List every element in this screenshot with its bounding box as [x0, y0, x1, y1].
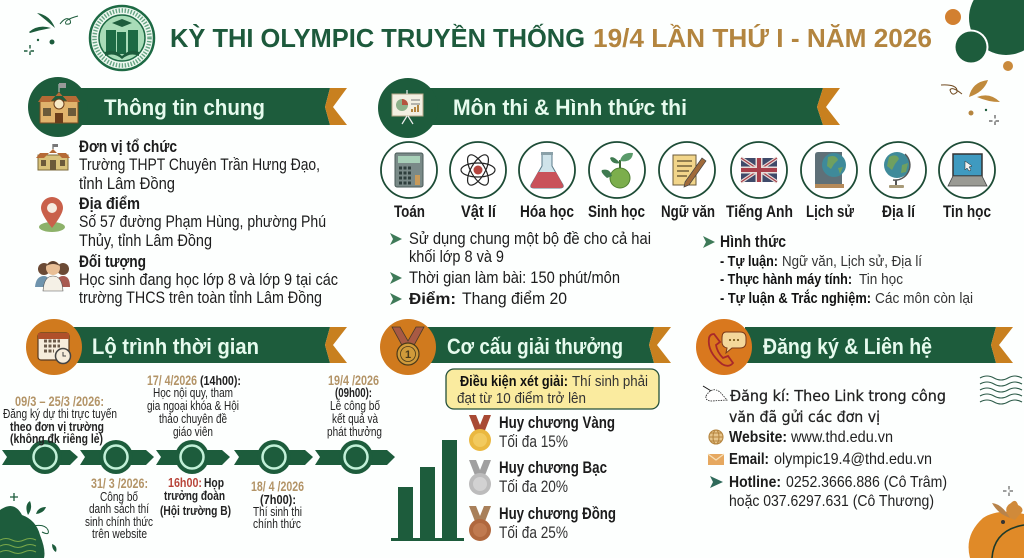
timeline arrows — [2, 450, 395, 465]
text: email: Email: — [729, 451, 769, 468]
milestone: 16h00 — [160, 475, 231, 518]
subject: Địa lí: Địa lí — [882, 202, 916, 221]
milestone: 19/4: (09h00): — [335, 385, 372, 400]
text: exam rules bullets: Thang điểm 20 — [462, 289, 567, 308]
medal: gold: Tối đa 15% — [499, 432, 568, 451]
milestone: 09/3 - 25/3: theo đơn vị trường — [10, 419, 104, 434]
callout: điều kiện xét giải: Điều kiện xét giải: — [460, 373, 568, 390]
subject: Hóa học — [519, 142, 575, 221]
header: Lộ trình thời gian — [26, 319, 347, 375]
milestone: 16h00: 16h00: — [168, 475, 202, 490]
medal: gold: Huy chương Vàng — [499, 413, 615, 432]
text: registration: văn đã gửi các đơn vị — [729, 408, 880, 426]
milestone: 16h00: trưởng đoàn — [164, 488, 225, 503]
text: địa điểm: Địa điểm — [79, 194, 140, 213]
text: đối tượng: trường THCS trên toàn tỉnh Lâm Đồng — [79, 288, 322, 307]
header: Cơ cấu giải thưởng: Cơ cấu giải thưởng — [447, 334, 623, 359]
text: exam format: Các môn còn lại — [875, 290, 973, 307]
milestone: 31/3: sinh chính thức — [85, 514, 153, 529]
text: đơn vị tổ chức: Trường THPT Chuyên Trần Hưng Đạo, — [79, 155, 320, 174]
text: hotline: 0252.3666.886 (Cô Trâm) — [786, 474, 947, 491]
milestone: 09/3 - 25/3: Đăng ký dự thi trực tuyến — [3, 406, 117, 421]
text: exam format: Hình thức — [720, 232, 786, 251]
bar chart — [391, 440, 464, 541]
milestone: 17/4: 17/ 4/2026 — [147, 373, 197, 388]
text: địa điểm: Thủy, tỉnh Lâm Đồng — [79, 231, 212, 250]
milestone: 31/3: danh sách thí — [89, 501, 149, 516]
icon: arrow — [710, 476, 723, 488]
text: website: www.thd.edu.vn — [790, 429, 893, 446]
text: registration: Đăng kí: Theo Link trong công — [730, 387, 946, 405]
text: registration — [729, 387, 946, 426]
subject: Tin học — [939, 142, 995, 221]
text: website — [729, 429, 893, 446]
text: exam rules bullets: khối lớp 8 và 9 — [409, 247, 504, 266]
text: đơn vị tổ chức — [79, 137, 320, 193]
medal: bronze: Tối đa 25% — [499, 523, 568, 542]
icon: medal — [392, 327, 424, 365]
subject: Lịch sử: Lịch sử — [806, 202, 855, 221]
subject: Lịch sử — [801, 142, 857, 221]
text: hotline — [729, 474, 947, 510]
icon: school — [38, 83, 80, 123]
icon: presentation board — [392, 90, 423, 124]
subject: Ngữ văn: Ngữ văn — [661, 202, 715, 221]
text: hotline: Hotline: — [729, 474, 781, 491]
decoration: top left splash — [24, 13, 78, 57]
text: địa điểm — [79, 194, 326, 250]
text: đối tượng: Đối tượng — [79, 252, 146, 271]
header: Đăng ký & Liên hệ: Đăng ký & Liên hệ — [763, 334, 932, 359]
text: website: Website: — [729, 429, 787, 446]
header: Thông tin chung: Thông tin chung — [104, 95, 265, 120]
header: Môn thi & Hình thức thi — [378, 78, 840, 138]
icon: organizer school — [36, 144, 70, 170]
text: exam rules bullets — [390, 229, 651, 308]
milestone: 18/4: Thí sinh thi — [253, 504, 302, 519]
text: exam format — [703, 232, 973, 307]
header: Thông tin chung — [28, 77, 347, 137]
icon: phone and chat — [709, 332, 746, 366]
text: exam format: - Tự luận & Trắc nghiệm: — [720, 289, 871, 307]
icon: students — [35, 261, 70, 291]
icon: medal: 1 — [405, 349, 411, 361]
medal: silver — [469, 458, 607, 496]
milestone: 17/4: (14h00): — [200, 373, 241, 388]
panel: contact — [703, 386, 947, 510]
icon: pointer — [703, 386, 727, 401]
subject: Sinh học: Sinh học — [588, 202, 645, 221]
icon: calendar clock — [38, 333, 70, 364]
callout: điều kiện xét giải — [446, 369, 659, 409]
text: hotline: hoặc 037.6297.631 (Cô Thương) — [729, 493, 934, 510]
subject: Sinh học — [588, 142, 645, 221]
milestone: 31/3 — [85, 476, 153, 541]
header: Lộ trình thời gian: Lộ trình thời gian — [92, 334, 259, 359]
milestone: 17/4 — [147, 373, 241, 439]
medal: silver: Huy chương Bạc — [499, 458, 607, 477]
medal: bronze: Huy chương Đồng — [499, 504, 616, 523]
title: KỲ THI OLYMPIC TRUYỀN THỐNG — [170, 23, 585, 53]
callout: điều kiện xét giải: Thí sinh phải — [572, 373, 648, 390]
milestone: 09/3 - 25/3: (không đk riêng lẻ) — [10, 431, 103, 446]
subject: Tiếng Anh: Tiếng Anh — [726, 202, 793, 221]
milestone: 16h00: (Hội trường B) — [160, 503, 231, 518]
milestone: 19/4: phát thưởng — [327, 424, 382, 439]
subject: Vật lí — [450, 142, 506, 221]
medal: silver: Tối đa 20% — [499, 477, 568, 496]
milestone: 09/3 - 25/3: 09/3 – 25/3 /2026: — [15, 394, 104, 409]
panel: subject icons — [381, 142, 995, 221]
logo — [90, 6, 154, 70]
milestone: 16h00: Họp — [204, 475, 224, 490]
header: Môn thi & Hình thức thi: Môn thi & Hình thức thi — [453, 95, 687, 120]
milestone: 19/4: kết quả và — [332, 411, 379, 426]
medal: gold — [469, 413, 615, 451]
decoration: bottom right blob — [969, 486, 1024, 558]
milestone: 09/3 - 25/3 — [3, 394, 117, 446]
text: exam format: - Tự luận: — [720, 253, 778, 270]
text: exam rules bullets: Sử dụng chung một bộ đề cho cả hai — [409, 229, 651, 248]
milestone: 17/4: gia ngoại khóa & Hội — [147, 398, 239, 413]
milestone: 17/4: thảo chuyên đề — [159, 411, 227, 426]
text: đơn vị tổ chức: tỉnh Lâm Đồng — [79, 174, 175, 193]
milestone: 19/4: Lễ công bố — [330, 398, 380, 413]
subject: Tin học: Tin học — [943, 202, 991, 221]
text: exam format: Tin học — [859, 271, 903, 288]
title: 19/4 LẦN THỨ I - NĂM 2026 — [593, 23, 932, 53]
text: exam rules bullets: Điểm: — [409, 290, 456, 308]
text: exam rules bullets: Thời gian làm bài: 150 phút/môn — [409, 268, 620, 287]
timeline — [2, 373, 395, 541]
text: đối tượng — [79, 252, 338, 307]
panel: thông tin chung — [35, 137, 338, 307]
milestone: 18/4: (7h00): — [260, 492, 296, 507]
decoration: wavy lines — [980, 376, 1022, 404]
decoration: bottom left blob — [0, 493, 56, 558]
milestone: 31/3: trên website — [92, 526, 147, 541]
text: đơn vị tổ chức: Đơn vị tổ chức — [79, 137, 177, 156]
callout: điều kiện xét giải: đạt từ 10 điểm trở lên — [457, 390, 586, 407]
subject: Tiếng Anh — [726, 142, 793, 221]
icon: email — [708, 454, 724, 465]
milestone: 17/4: Học nội quy, tham — [153, 385, 233, 400]
subject: Ngữ văn — [659, 142, 715, 221]
text: exam format: Ngữ văn, Lịch sử, Địa lí — [782, 253, 923, 270]
title — [170, 23, 932, 53]
subject: Toán — [381, 142, 437, 221]
header: Đăng ký & Liên hệ — [696, 319, 1013, 375]
milestone: 31/3: Công bố — [100, 489, 138, 504]
decoration: top right circles — [941, 0, 1024, 128]
subject: Vật lí: Vật lí — [461, 202, 497, 221]
text: email: olympic19.4@thd.edu.vn — [774, 451, 932, 468]
milestone: 18/4: 18/ 4 /2026 — [251, 479, 304, 494]
icon: map pin — [39, 197, 65, 232]
milestone: 31/3: 31/ 3 /2026: — [91, 476, 148, 491]
text: địa điểm: Số 57 đường Phạm Hùng, phường Phú — [79, 212, 326, 231]
milestone: 17/4: giáo viên — [173, 424, 213, 439]
milestone: 19/4 — [327, 373, 382, 439]
text: exam format: - Thực hành máy tính: — [720, 271, 852, 288]
subject: Địa lí — [870, 142, 926, 221]
milestone: 19/4: 19/4 /2026 — [328, 373, 379, 388]
timeline nodes — [28, 440, 373, 474]
milestone: 18/4 — [251, 479, 304, 531]
subject: Hóa học: Hóa học — [520, 202, 574, 221]
header: Cơ cấu giải thưởng — [380, 319, 671, 375]
icon: globe — [709, 430, 723, 444]
milestone: 18/4: chính thức — [253, 516, 301, 531]
text: đối tượng: Học sinh đang học lớp 8 và lớp 9 tại các — [79, 270, 338, 289]
medal: bronze — [469, 504, 616, 542]
subject: Toán: Toán — [394, 202, 425, 221]
